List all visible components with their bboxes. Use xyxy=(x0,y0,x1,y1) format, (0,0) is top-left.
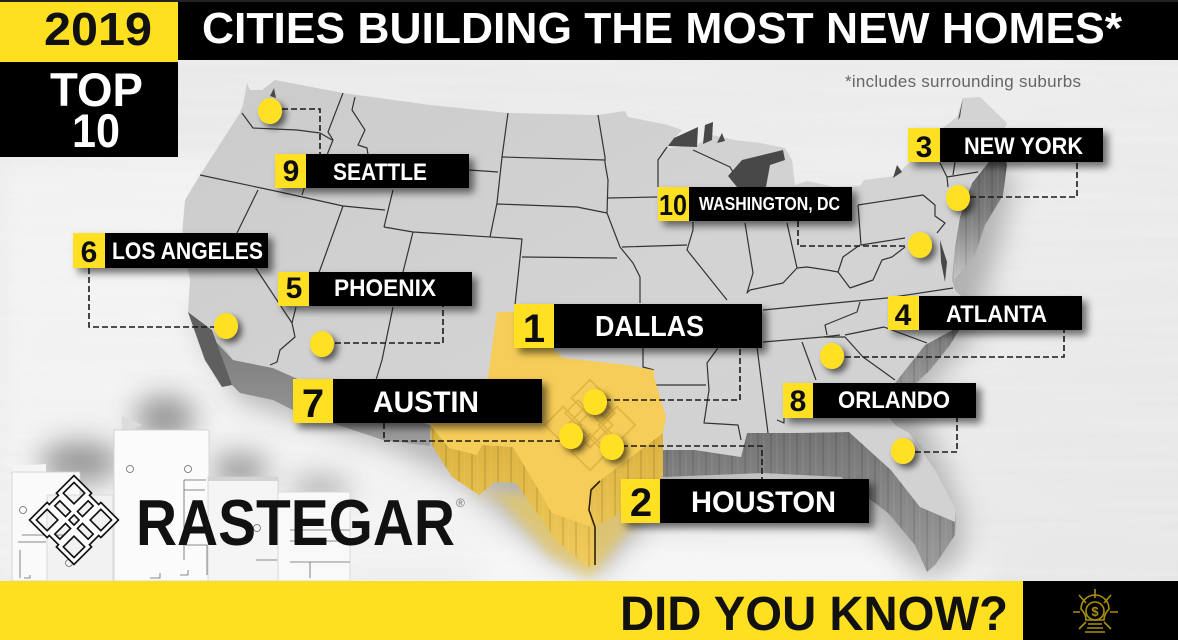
marker: Washington DC xyxy=(908,232,932,258)
label: 2 Houston: HOUSTON xyxy=(691,486,836,519)
Texas extrusion xyxy=(430,425,663,567)
label: 9 Seattle xyxy=(275,154,469,188)
icon: light bulb with dollar sign: $ xyxy=(1091,604,1099,619)
Texas top surface xyxy=(430,312,666,527)
blueprint rolls xyxy=(12,396,350,581)
icon: light bulb with dollar sign xyxy=(1073,589,1118,632)
label: 9 Seattle: SEATTLE xyxy=(333,159,427,186)
label: 3 New York: NEW YORK xyxy=(964,133,1084,160)
label: 8 Orlando xyxy=(783,383,976,418)
label: 10 Washington DC xyxy=(658,187,852,222)
label: 4 Atlanta: ATLANTA xyxy=(946,301,1047,328)
title: CITIES BUILDING THE MOST NEW HOMES* xyxy=(202,4,1123,53)
label: 3 New York xyxy=(908,128,1103,164)
map extruded edges xyxy=(188,140,1007,572)
label: 7 Austin xyxy=(293,379,542,426)
label: 2 Houston xyxy=(621,479,869,525)
label: 5 Phoenix: 5 xyxy=(286,272,302,305)
marker: Atlanta xyxy=(820,343,844,369)
panel: US map xyxy=(182,80,1015,580)
label: 7 Austin: AUSTIN xyxy=(373,386,479,419)
label: 5 Phoenix xyxy=(278,272,472,306)
label: 8 Orlando: ORLANDO xyxy=(838,387,950,414)
label: 4 Atlanta xyxy=(888,296,1082,332)
label: 8 Orlando: 8 xyxy=(790,385,806,418)
map cast shadow xyxy=(195,170,1015,580)
marker: Houston xyxy=(600,434,624,460)
Texas coast crack xyxy=(589,481,600,565)
marker: New York xyxy=(946,185,970,211)
footer bar xyxy=(0,581,1178,640)
marker: Orlando xyxy=(891,438,915,464)
label: 2 Houston: 2 xyxy=(630,481,652,525)
label: 1 Dallas: DALLAS xyxy=(595,311,704,343)
label: 10 Washington DC: 10 xyxy=(659,190,687,222)
marker: Los Angeles xyxy=(214,313,238,339)
label: 6 Los Angeles: LOS ANGELES xyxy=(112,238,263,265)
Texas yellow glow xyxy=(470,490,640,578)
watermark knot on Texas xyxy=(545,380,635,470)
header bar xyxy=(0,0,1178,62)
year: 2019 xyxy=(44,3,152,55)
map top surface xyxy=(182,80,1007,522)
leader lines xyxy=(89,109,1077,479)
label: 1 Dallas: 1 xyxy=(523,307,545,351)
label: 1 Dallas xyxy=(514,304,762,351)
marker: Phoenix xyxy=(310,331,334,357)
top 10 badge xyxy=(0,62,178,157)
marker: Seattle xyxy=(258,98,282,124)
city markers xyxy=(214,98,970,464)
label: 6 Los Angeles: 6 xyxy=(81,236,97,269)
logo: Rastegar knot xyxy=(33,479,115,561)
marker: Austin xyxy=(559,423,583,449)
label: 6 Los Angeles xyxy=(73,233,268,269)
did you know: DID YOU KNOW? xyxy=(620,588,1008,640)
marker: Dallas xyxy=(583,389,607,415)
state borders xyxy=(200,93,978,440)
blueprint drawing lines xyxy=(18,466,350,578)
label: 5 Phoenix: PHOENIX xyxy=(334,275,436,302)
top 10 badge: TOP xyxy=(50,63,143,116)
Texas extrusion grooves xyxy=(430,425,663,567)
label: 3 New York: 3 xyxy=(916,131,932,164)
registered mark: ® xyxy=(456,496,465,510)
label: 7 Austin: 7 xyxy=(302,382,324,426)
label: 9 Seattle: 9 xyxy=(283,155,299,188)
top 10 badge: 10 xyxy=(72,104,120,157)
icon: lakes dark shading xyxy=(270,88,963,282)
label: 4 Atlanta: 4 xyxy=(895,299,912,332)
label: 10 Washington DC: WASHINGTON, DC xyxy=(699,194,840,214)
footnote: *includes surrounding suburbs xyxy=(845,72,1081,91)
roll shadows xyxy=(40,396,350,497)
logo wordmark: RASTEGAR xyxy=(136,486,455,559)
